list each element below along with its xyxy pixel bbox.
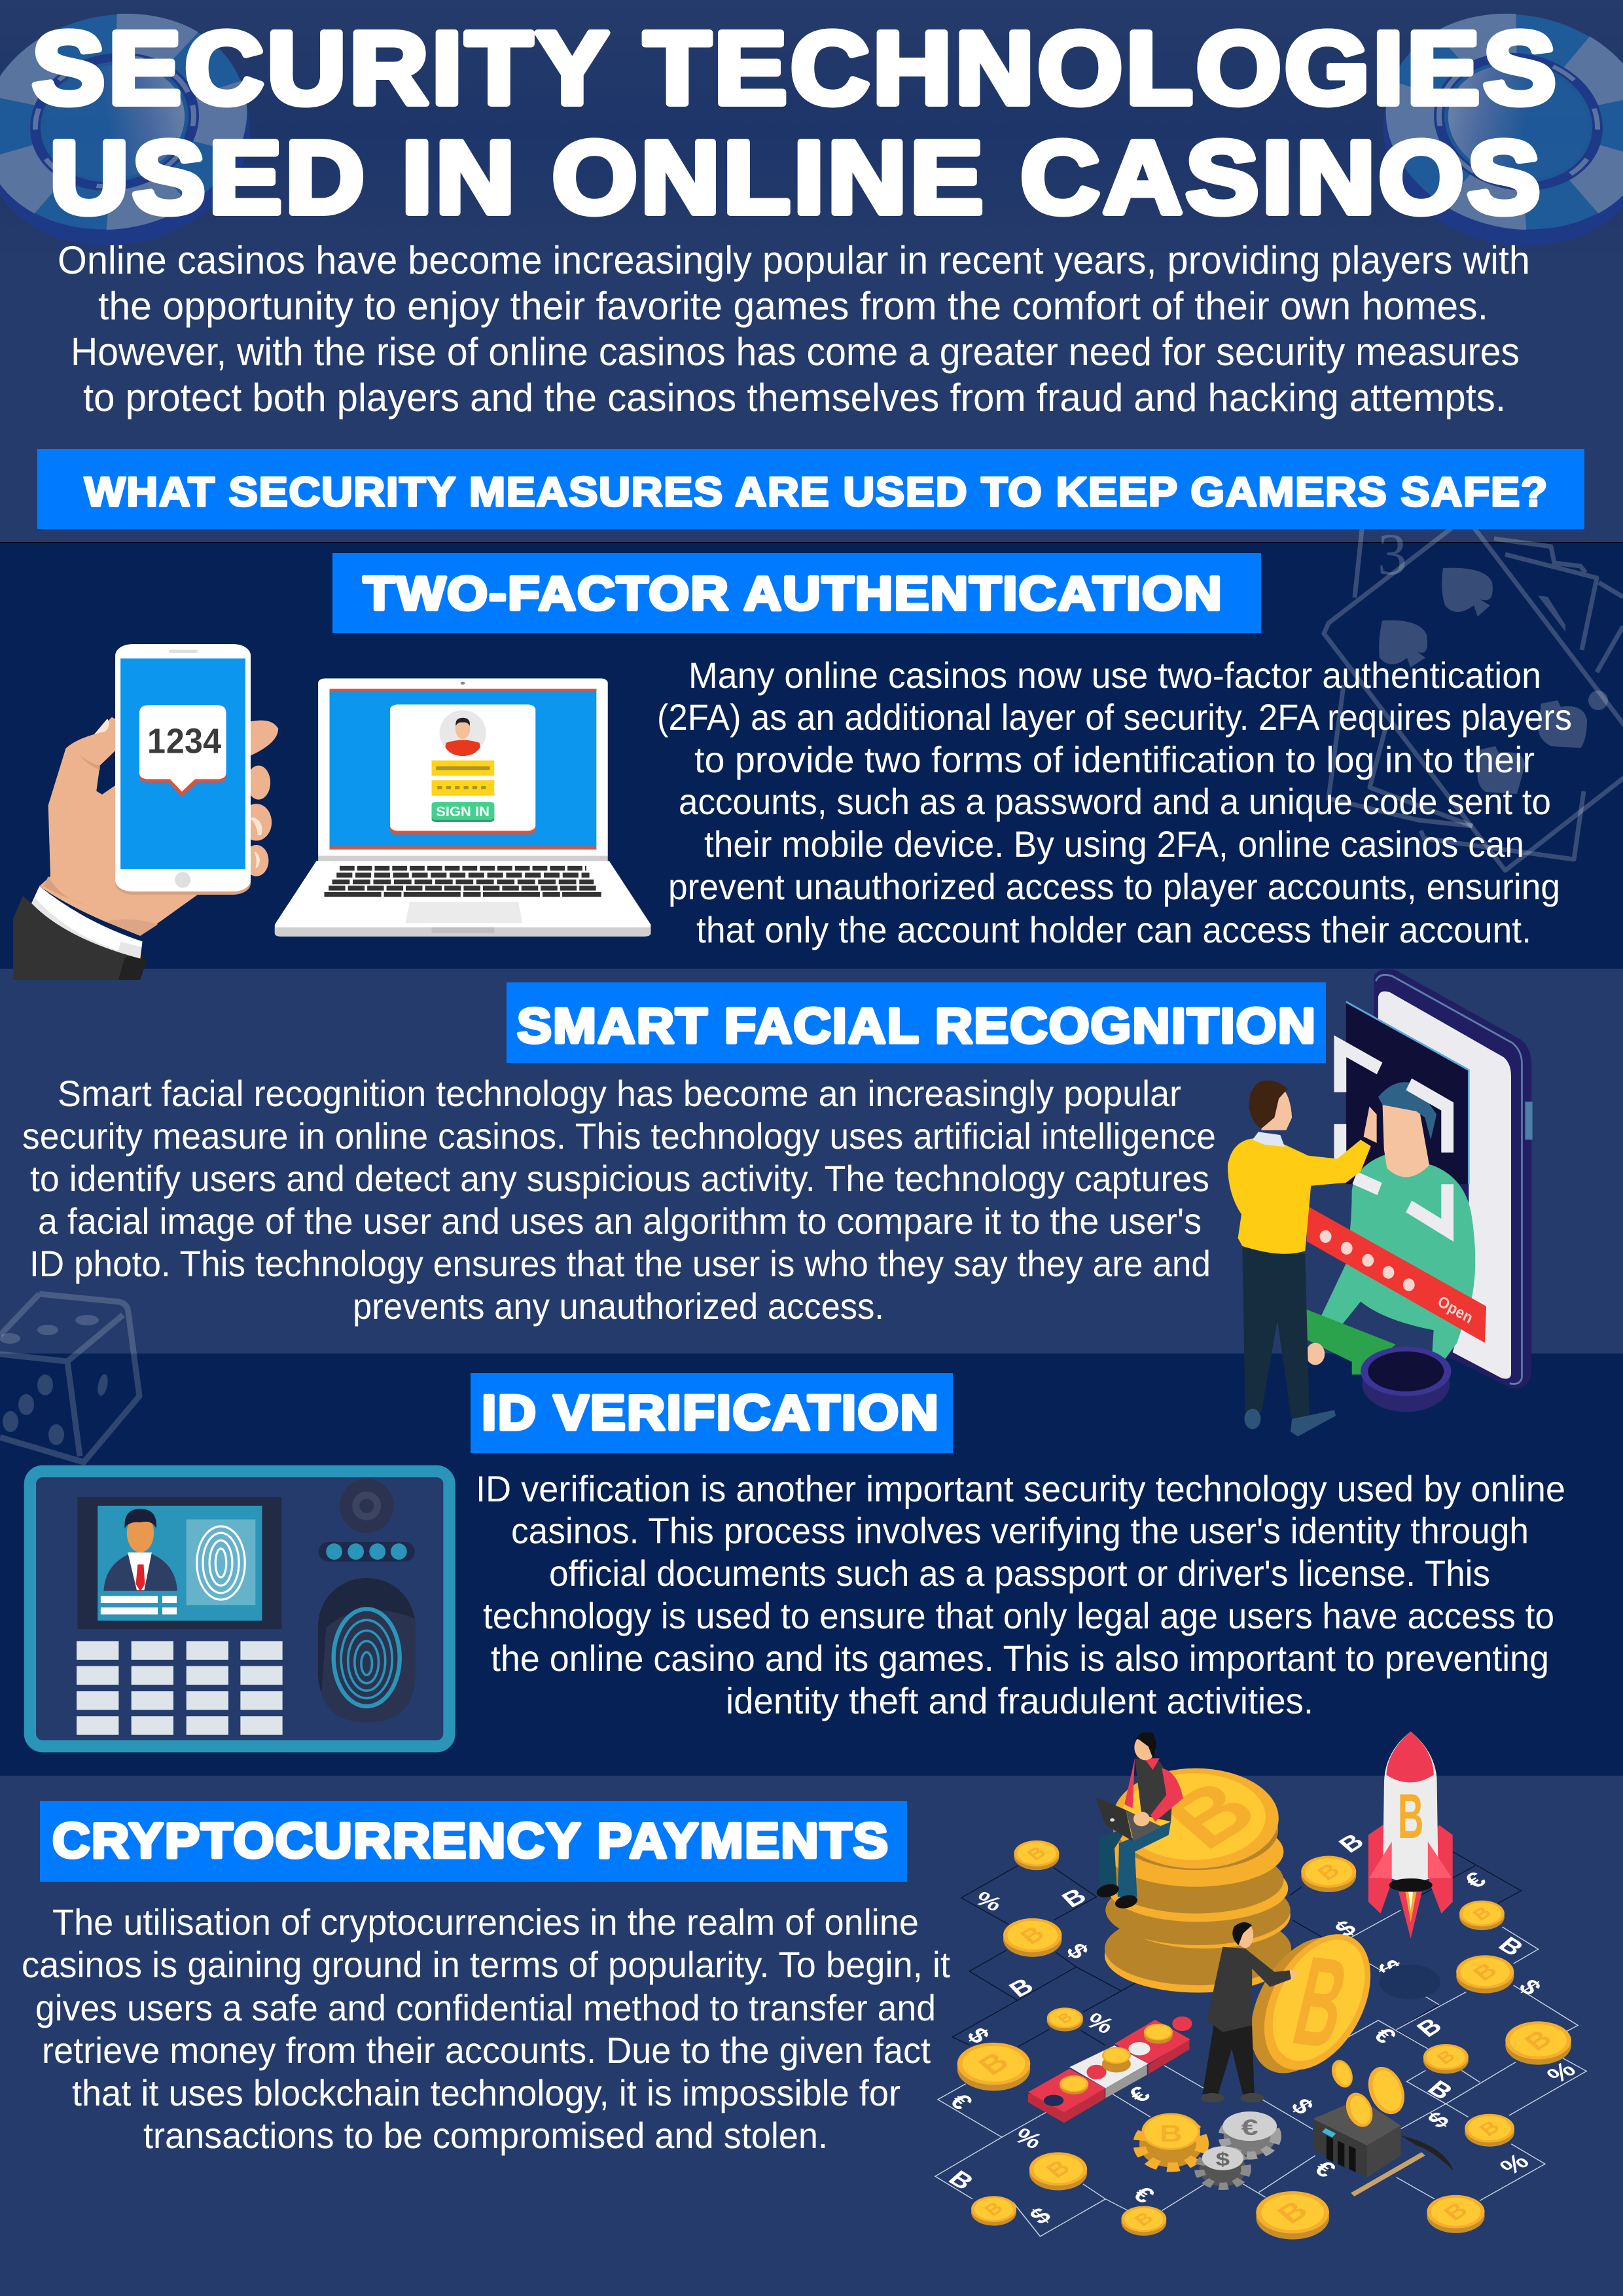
hand palm xyxy=(39,717,202,936)
text block: id verification description: identity theft and fraudulent activities. xyxy=(726,1680,1313,1721)
id fingerprint xyxy=(187,1519,255,1605)
icon: biometric id terminal xyxy=(30,1471,450,1746)
small coins: B xyxy=(980,2199,1008,2219)
text block: cryptocurrency description: The utilisation of cryptocurrencies in the realm of online xyxy=(52,1901,919,1943)
text block: id verification description: ID verification is another important security technology used by online xyxy=(476,1468,1565,1509)
heading: cryptocurrency payments xyxy=(40,1801,907,1882)
keypad xyxy=(77,1641,283,1735)
standing man xyxy=(1242,1247,1310,1422)
currency symbols: € xyxy=(1308,2157,1341,2182)
currency symbols: € xyxy=(1127,2182,1160,2208)
text block: id verification description: casinos. This process involves verifying the user's identity through xyxy=(511,1510,1529,1551)
text block: id verification description: the online casino and its games. This is also important to preventing xyxy=(491,1638,1549,1679)
currency symbols: $ xyxy=(1371,1956,1407,1979)
standing man with big coin xyxy=(1201,1922,1390,2102)
gears xyxy=(1139,2111,1277,2186)
currency symbols: B xyxy=(942,2166,979,2195)
icon: right casino chip xyxy=(1363,0,1623,270)
currency symbols: € xyxy=(1459,1867,1492,1893)
text block: id verification description xyxy=(476,1468,1565,1721)
green bar and disc xyxy=(1307,1310,1396,1374)
currency symbols: % xyxy=(1541,2057,1582,2088)
currency symbols: B xyxy=(1493,1933,1529,1961)
text block: facial recognition description: Smart facial recognition technology has become an increasingly popular xyxy=(58,1073,1181,1114)
currency symbols: € xyxy=(1123,2082,1156,2108)
currency symbols: $ xyxy=(1060,1939,1095,1964)
text block: facial recognition description: prevents any unauthorized access. xyxy=(353,1285,884,1327)
text block: introduction: to protect both players and the casinos themselves from fraud and hacking attempts. xyxy=(83,376,1506,420)
icon: hand holding phone with code xyxy=(13,644,278,980)
rocket: B xyxy=(1398,1780,1423,1852)
currency symbols: % xyxy=(971,1887,1007,1915)
currency symbols: B xyxy=(1057,1884,1092,1912)
currency symbols: $ xyxy=(1329,1916,1363,1942)
rocket xyxy=(1368,1732,1453,1939)
heading: cryptocurrency payments: CRYPTOCURRENCY PAYMENTS xyxy=(52,1813,889,1868)
phone screen xyxy=(1346,1002,1469,1184)
title: USED IN ONLINE CASINOS xyxy=(50,120,1544,235)
sleeve xyxy=(13,896,147,980)
small coins: B xyxy=(1054,2009,1076,2026)
text block: two-factor description: Many online casinos now use two-factor authentication xyxy=(688,655,1541,696)
code bubble xyxy=(139,705,226,797)
heading: two-factor authentication: TWO-FACTOR AUTHENTICATION xyxy=(363,567,1223,620)
heading: id verification xyxy=(471,1373,953,1453)
banner: what security measures xyxy=(37,449,1584,529)
text block: cryptocurrency description: that it uses blockchain technology, it is impossible for xyxy=(72,2072,901,2113)
standing man with big coin: B xyxy=(1282,1929,1359,2075)
currency symbols: % xyxy=(1495,2149,1535,2179)
mining rig with pickaxe xyxy=(1313,2058,1454,2195)
panel: id verification background xyxy=(0,1354,1623,1776)
text block: cryptocurrency description: transactions to be compromised and stolen. xyxy=(143,2115,828,2156)
fingerprint scanner xyxy=(318,1578,416,1722)
text block: facial recognition description: security measure in online casinos. This technology uses artificial intelligence xyxy=(22,1115,1216,1157)
text block: two-factor description: prevent unauthorized access to player accounts, ensuring xyxy=(668,866,1560,907)
small coins: B xyxy=(1312,1859,1346,1884)
panel: smart facial recognition background xyxy=(0,969,1623,1354)
banner: what security measures: WHAT SECURITY MEASURES ARE USED TO KEEP GAMERS SAFE? xyxy=(84,469,1548,515)
currency symbols: $ xyxy=(961,2024,995,2048)
shadow under rocket xyxy=(1379,1965,1440,2000)
illustration: cryptocurrency network xyxy=(935,1732,1586,2240)
icon: hand holding phone with code: 1234 xyxy=(147,722,221,761)
text block: cryptocurrency description xyxy=(22,1901,950,2156)
title xyxy=(32,11,1560,235)
text block: two-factor description: accounts, such as a password and a unique code sent to xyxy=(679,781,1551,822)
keyboard xyxy=(325,869,601,895)
text block: introduction: However, with the rise of online casinos has come a greater need for security measures xyxy=(71,330,1520,374)
icon: dice watermark xyxy=(0,1294,139,1462)
red password bar xyxy=(1307,1206,1486,1343)
fingers xyxy=(251,721,278,755)
man with laptop xyxy=(1094,1732,1183,1911)
text block: two-factor description: their mobile device. By using 2FA, online casinos can xyxy=(704,823,1524,865)
coin stack xyxy=(1105,1763,1291,1992)
currency symbols: € xyxy=(944,2090,978,2114)
text block: facial recognition description: a facial image of the user and uses an algorithm to compare it to the user's xyxy=(38,1200,1202,1242)
gears: € xyxy=(1241,2115,1258,2140)
text block: cryptocurrency description: retrieve money from their accounts. Due to the given fact xyxy=(42,2030,931,2071)
small coins: B xyxy=(1131,2209,1158,2230)
camera and lights xyxy=(340,1479,394,1533)
text block: facial recognition description xyxy=(22,1073,1216,1327)
heading: id verification: ID VERIFICATION xyxy=(482,1385,940,1440)
phone xyxy=(115,648,251,895)
title: SECURITY TECHNOLOGIES xyxy=(32,11,1560,126)
portrait on screen xyxy=(1320,1154,1475,1359)
currency symbols: B xyxy=(1422,2076,1458,2104)
icon: playing cards watermark xyxy=(1324,517,1623,870)
currency symbols: % xyxy=(1009,2124,1047,2154)
small coins: B xyxy=(1468,1958,1503,1985)
small coins: B xyxy=(1024,1843,1050,1864)
panel: cryptocurrency background xyxy=(0,1776,1623,2296)
text block: cryptocurrency description: casinos is gaining ground in terms of popularity. To begin, it xyxy=(22,1944,950,1985)
text block: facial recognition description: to identify users and detect any suspicious activity. The technology captures xyxy=(30,1158,1209,1199)
scan brackets xyxy=(1340,1046,1448,1230)
text block: two-factor description: (2FA) as an additional layer of security. 2FA requires players xyxy=(657,696,1572,738)
icon: left casino chip xyxy=(0,0,270,270)
currency symbols: $ xyxy=(1512,1975,1547,2000)
panel: two-factor authentication background xyxy=(0,542,1623,969)
gears: B xyxy=(1160,2121,1183,2147)
small coins: B xyxy=(1270,2195,1315,2229)
currency symbols: $ xyxy=(1285,2094,1319,2119)
small coins xyxy=(957,1840,1571,2240)
currency symbols: $ xyxy=(1422,2107,1455,2133)
login card xyxy=(390,709,535,834)
currency symbols: € xyxy=(1367,2024,1402,2048)
currency symbols: B xyxy=(1333,1829,1370,1857)
small coins: B xyxy=(1518,2025,1558,2056)
small coins: B xyxy=(1433,2047,1460,2068)
small coins: B xyxy=(1469,1903,1496,1924)
currency symbols: % xyxy=(1080,2009,1119,2039)
small coins: B xyxy=(1438,2198,1473,2225)
currency symbols xyxy=(942,1829,1582,2229)
id portrait xyxy=(103,1554,177,1591)
text block: facial recognition description: ID photo. This technology ensures that the user is who they say they are and xyxy=(29,1243,1211,1284)
text block: introduction: Online casinos have become increasingly popular in recent years, providing players with xyxy=(58,238,1530,282)
text block: two-factor description: that only the account holder can access their account. xyxy=(696,909,1531,950)
small coins: B xyxy=(1014,1922,1050,1948)
currency symbols: $ xyxy=(1024,2203,1057,2229)
puzzle with coins xyxy=(1028,2017,1192,2123)
text block: two-factor description xyxy=(657,655,1572,950)
icon: man scanning his face on a phone xyxy=(1228,969,1533,1437)
text block: introduction: the opportunity to enjoy their favorite games from the comfort of their own homes. xyxy=(98,284,1488,328)
small coins: B xyxy=(1474,2117,1505,2140)
text block: id verification description: official documents such as a passport or driver's license. This xyxy=(549,1552,1490,1594)
coin stack: B xyxy=(1145,1763,1277,1865)
icon: laptop with sign-in screen xyxy=(275,678,651,937)
text block: two-factor description: to provide two forms of identification to log in to their xyxy=(694,739,1535,780)
text block: introduction xyxy=(58,238,1530,420)
text block: id verification description: technology is used to ensure that only legal age users have access to xyxy=(483,1595,1554,1636)
small coins: B xyxy=(972,2047,1016,2081)
currency symbols: B xyxy=(1004,1974,1039,2002)
icon: laptop with sign-in screen: SIGN IN xyxy=(436,803,490,819)
heading: smart facial recognition xyxy=(507,982,1326,1063)
text block: cryptocurrency description: gives users a safe and confidential method to transfer and xyxy=(35,1987,936,2028)
heading: smart facial recognition: SMART FACIAL RECOGNITION xyxy=(517,998,1317,1053)
network lines xyxy=(935,1852,1586,2236)
icon: playing cards watermark: 3 xyxy=(1378,522,1407,587)
heading: two-factor authentication xyxy=(332,553,1261,633)
gears: $ xyxy=(1216,2149,1230,2170)
currency symbols: B xyxy=(1412,2014,1448,2042)
small coins: B xyxy=(1041,2155,1075,2182)
panel: intro background xyxy=(0,0,1623,543)
icon: man scanning his face on a phone: Open xyxy=(1435,1292,1476,1327)
